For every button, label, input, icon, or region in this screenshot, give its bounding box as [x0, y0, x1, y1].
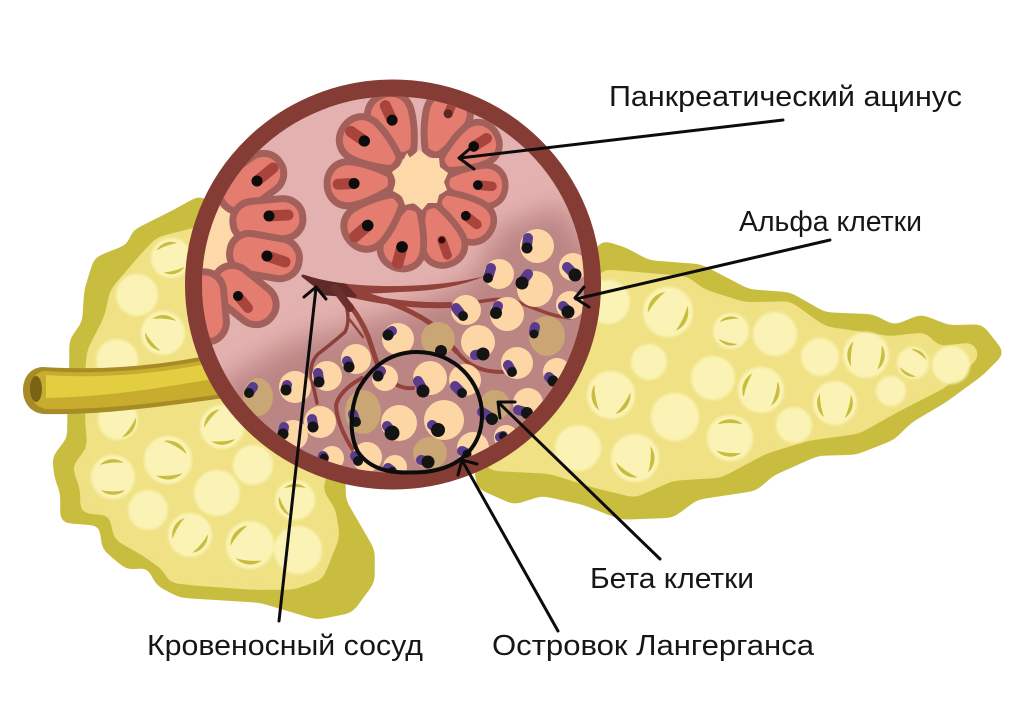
blood vessels: [303, 275, 570, 450]
left lumen: [203, 207, 234, 270]
brown delta cells: [243, 316, 565, 469]
arrow: islet of Langerhans: [458, 460, 558, 631]
label: blood vessel: Кровеносный сосуд: [147, 630, 423, 662]
left lobe crescents: [99, 239, 306, 566]
pancreas: left lobe: [53, 196, 374, 619]
black cell nuclei: [244, 242, 582, 475]
arrow: blood vessel: [279, 287, 326, 621]
label: beta cells: Бета клетки: [590, 563, 754, 595]
pancreas: right body: [470, 241, 1004, 519]
purple cell nuclei: [250, 238, 573, 471]
magnified circle: [185, 80, 601, 490]
arrow: alpha cells: [575, 240, 830, 307]
upper acinus: [326, 86, 507, 274]
right body lobules: [555, 280, 970, 482]
label: alpha cells: Альфа клетки: [739, 206, 922, 238]
left acinus: [202, 150, 306, 345]
peach islet cells: [278, 229, 587, 479]
left lobe lobules: [91, 238, 322, 574]
right body crescents: [589, 288, 929, 482]
circle ring: [194, 88, 592, 481]
arrow: pancreatic acinus: [459, 120, 783, 169]
circle interior: [202, 96, 584, 472]
label: pancreatic acinus: Панкреатический ацинус: [609, 81, 962, 113]
arrow: beta cells: [498, 402, 660, 559]
islet of Langerhans outline: [352, 352, 482, 473]
pancreatic duct: [23, 354, 225, 414]
label: islet of Langerhans: Островок Лангерганса: [492, 630, 815, 662]
